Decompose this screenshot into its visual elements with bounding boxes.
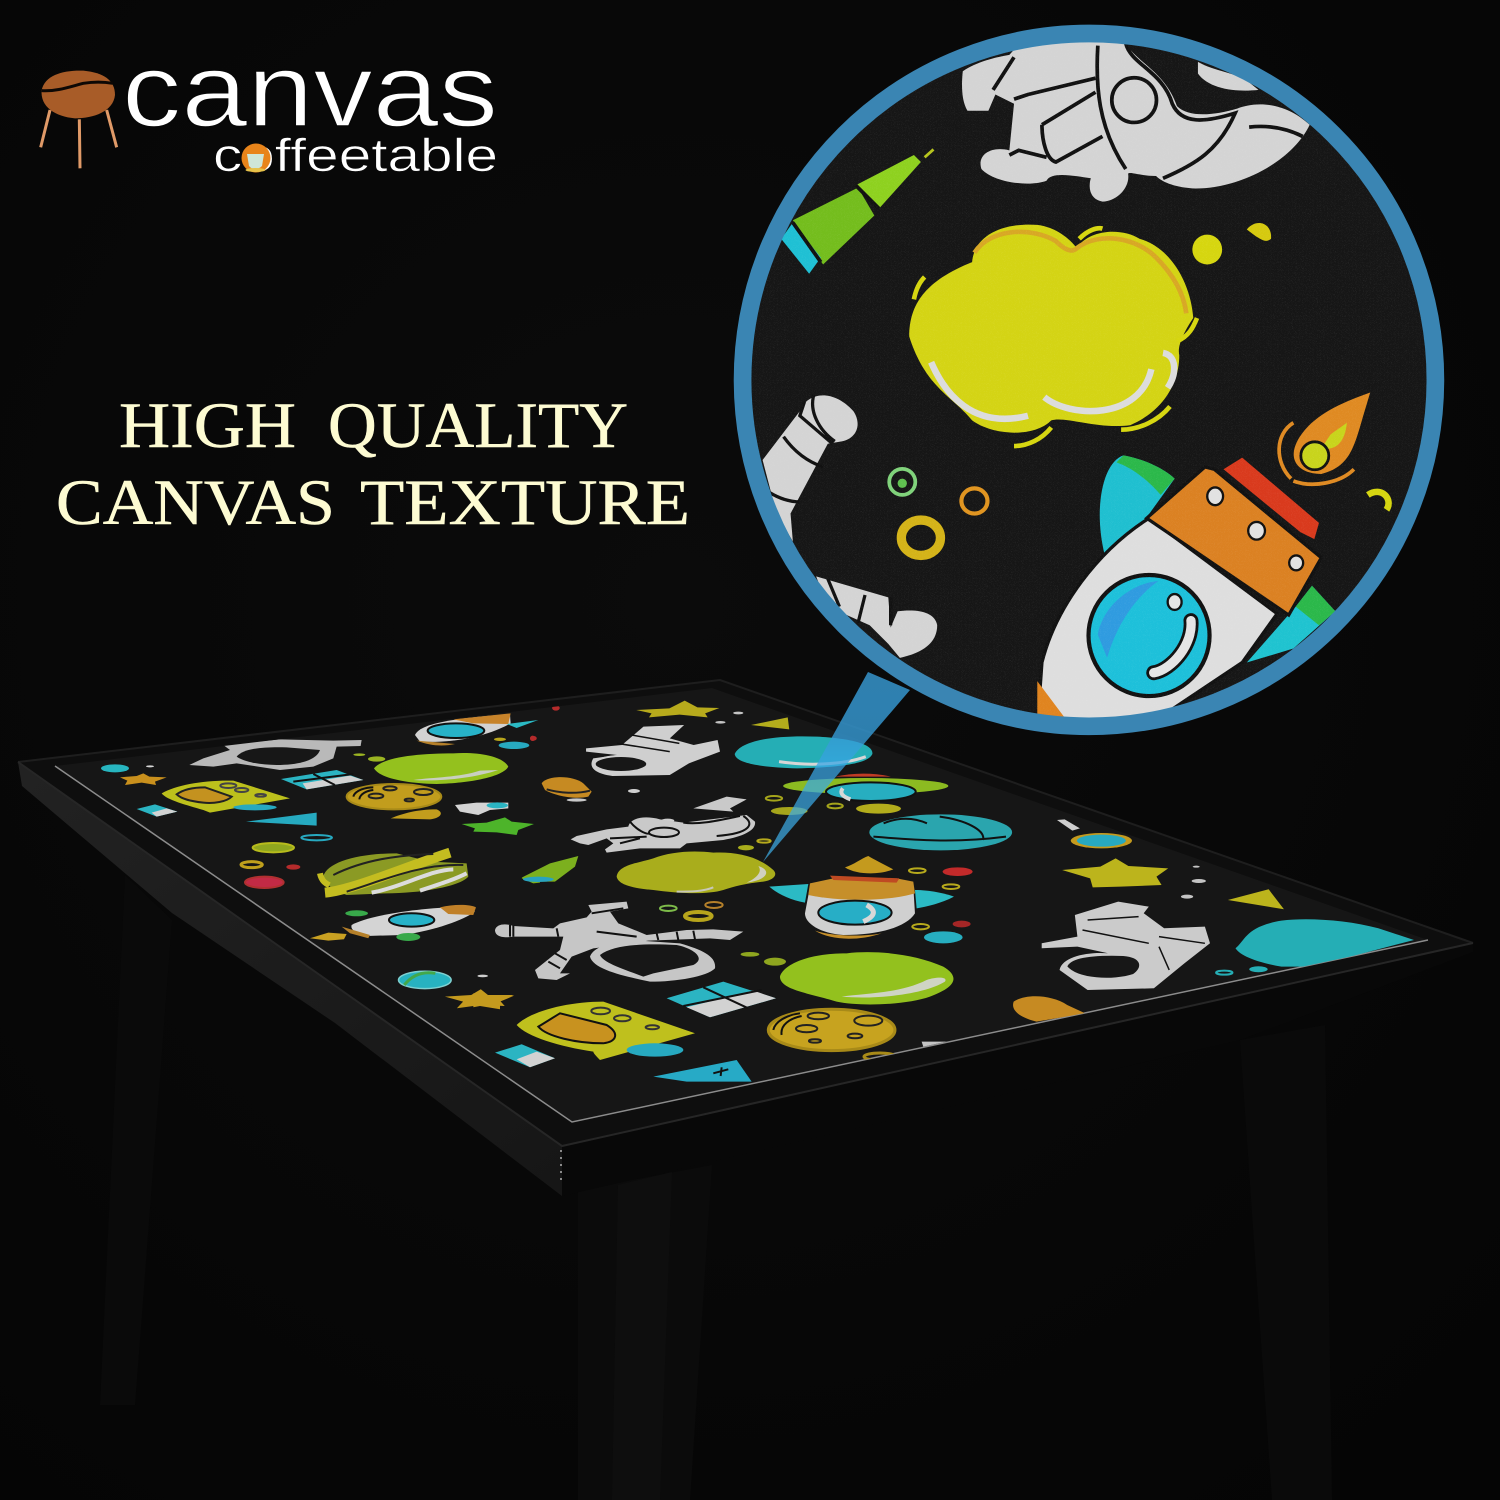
yellow star right	[1062, 858, 1168, 887]
top astronaut	[189, 739, 362, 770]
small dots	[715, 712, 743, 724]
flying rocket	[310, 905, 476, 941]
small white dot	[477, 975, 488, 977]
bubbles	[889, 469, 1389, 555]
yellow star	[636, 701, 719, 717]
magnifier lens	[730, 20, 1456, 746]
moon bubbles and small items	[494, 736, 535, 749]
heading line 2	[56, 467, 690, 539]
lower star	[445, 989, 514, 1008]
green star	[462, 817, 534, 835]
tiny dots	[1181, 866, 1206, 899]
triangle right	[1228, 889, 1284, 909]
big rocket	[1037, 455, 1335, 728]
big astronaut fragment	[962, 34, 1310, 202]
yellow cloud	[909, 223, 1271, 446]
mid upper astronaut	[586, 725, 720, 776]
lower teal triangle	[653, 1060, 752, 1082]
teal planet	[869, 814, 1012, 850]
canvas weave speckle	[730, 20, 1456, 746]
white dash	[146, 765, 154, 767]
icon: coffee cup	[242, 144, 270, 172]
lower planet	[399, 971, 451, 989]
UFO planet	[783, 774, 948, 801]
callout pointer	[763, 672, 910, 862]
teal cloud	[735, 736, 872, 768]
green cloud big	[741, 952, 953, 1004]
green cone edge	[522, 878, 540, 884]
gift box	[281, 770, 363, 789]
teal triangle	[246, 813, 317, 826]
yellow cloud	[617, 851, 775, 893]
right astronaut	[1042, 902, 1210, 990]
canvas table surface	[55, 688, 1428, 1122]
edge fragments	[864, 1042, 947, 1060]
small bubbles	[241, 835, 332, 888]
print: upper left area	[101, 713, 540, 941]
UFO bubbles	[766, 796, 901, 815]
small gift box	[495, 1044, 555, 1067]
teal cloud right	[1216, 919, 1414, 975]
mini planets near top	[530, 705, 560, 741]
star orange	[120, 773, 167, 785]
big astronaut	[495, 902, 743, 982]
heading line 2: TEXTURE	[360, 467, 690, 539]
dash and small ring planet	[1057, 819, 1132, 848]
heading line 1: HIGH	[119, 390, 296, 462]
rocket body	[1037, 518, 1277, 728]
rocket flame	[1279, 392, 1370, 484]
moon big	[768, 1009, 895, 1051]
heading line 1: QUALITY	[328, 390, 628, 462]
mid astronaut	[571, 797, 755, 853]
lens ring	[743, 34, 1435, 726]
moon	[347, 784, 441, 809]
space print on table top	[101, 701, 1414, 1082]
rocket nose	[1037, 681, 1072, 728]
print: upper middle	[399, 705, 720, 1008]
heading line 1	[119, 390, 628, 462]
saturn planet	[320, 853, 468, 895]
green cone rocket	[522, 856, 578, 882]
lower star	[473, 993, 513, 1009]
logo	[41, 33, 498, 181]
rocket band	[1147, 467, 1321, 615]
yellow triangle	[751, 717, 789, 729]
astronaut arm	[763, 395, 858, 541]
table top frame	[18, 680, 1473, 1196]
yellow box	[162, 781, 290, 813]
logo wordmark: canvas	[122, 33, 498, 149]
portholes	[1207, 487, 1303, 570]
logo subtitle: coffeetable	[213, 129, 498, 181]
main rocket	[769, 856, 954, 939]
heading	[56, 390, 690, 539]
heading line 2: CANVAS	[56, 467, 335, 539]
small yellow shape	[391, 809, 441, 819]
orange capsule	[542, 777, 592, 802]
big yellow box	[517, 1002, 695, 1060]
rocket right fin	[1247, 586, 1335, 663]
green rocket	[781, 149, 933, 274]
small gift box	[137, 804, 177, 817]
astronaut foot	[816, 576, 937, 658]
gift box	[667, 982, 776, 1017]
print: right area	[636, 701, 1414, 1022]
rocket cap	[1224, 458, 1319, 539]
orange capsule lower	[1013, 996, 1085, 1022]
table legs	[100, 875, 1332, 1500]
print: centre area	[473, 777, 973, 1082]
icon: coffee bean table	[41, 71, 117, 168]
green blob	[353, 753, 508, 784]
rocket bubbles	[909, 867, 973, 943]
cloud bubbles	[660, 839, 771, 920]
top rocket	[415, 713, 538, 746]
small planet	[101, 764, 129, 772]
white dots	[628, 789, 674, 823]
rocket window	[1089, 575, 1210, 696]
tiny astronaut	[455, 802, 508, 815]
rocket left fin	[1100, 455, 1175, 555]
